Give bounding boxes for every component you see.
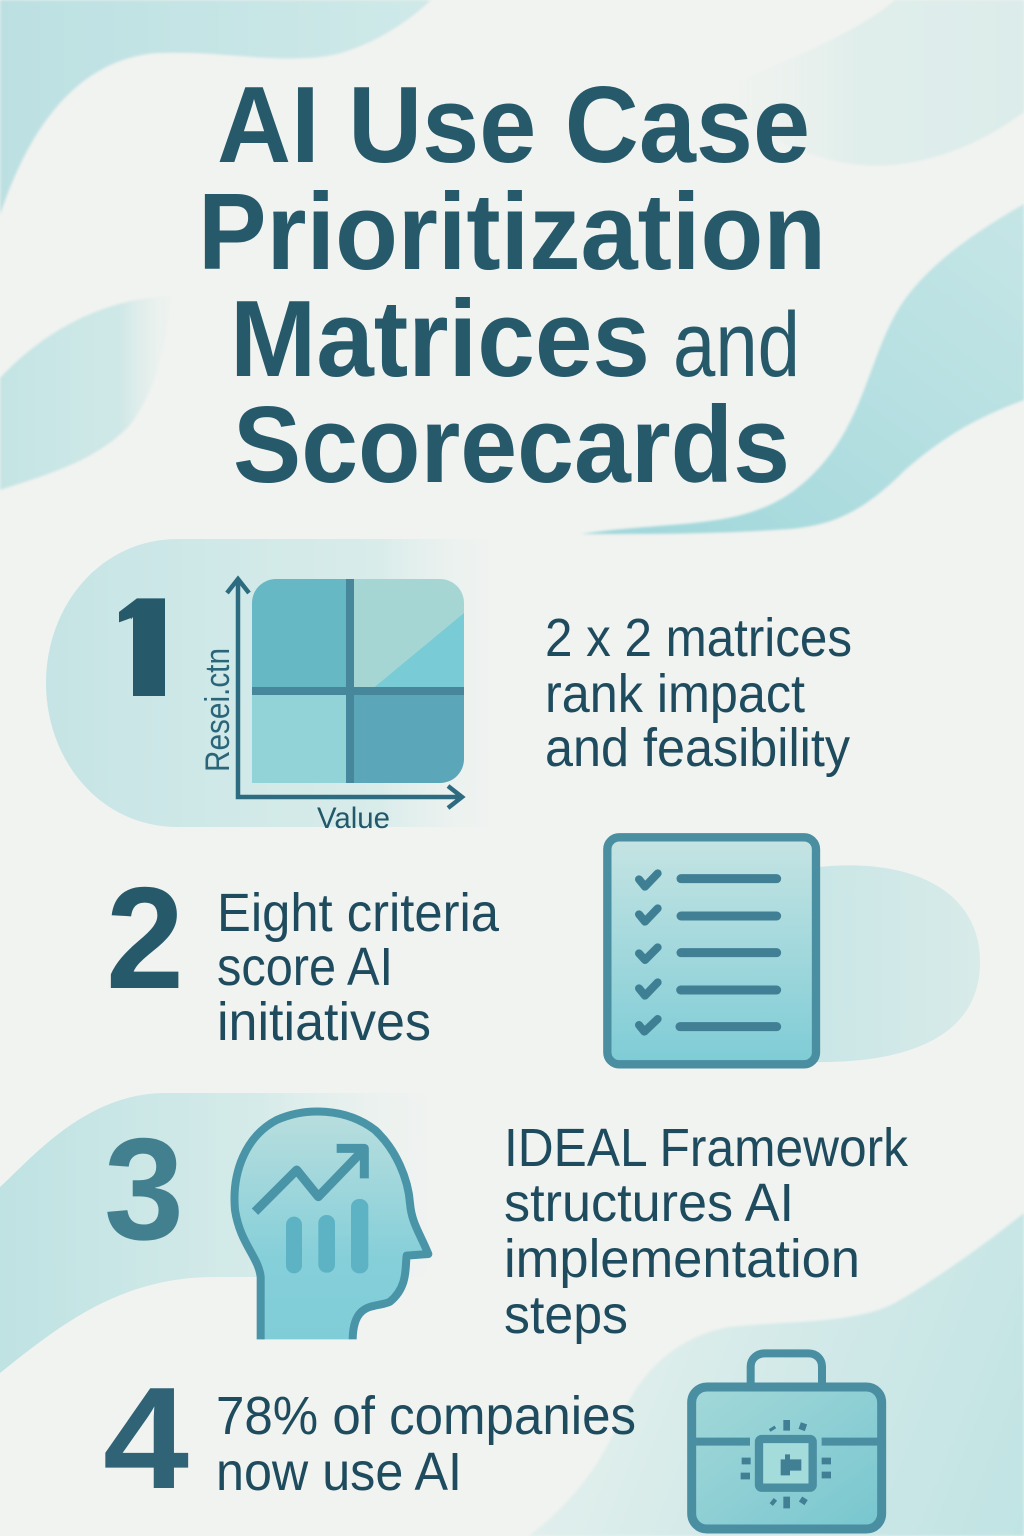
text 3: IDEAL Framework (504, 1118, 909, 1178)
y axis label: Resei.ctn (199, 648, 237, 772)
text 3: implementation (504, 1229, 860, 1289)
text 2: score AI (217, 937, 393, 997)
checkmarks (639, 873, 658, 1032)
case seam (693, 1430, 880, 1454)
title: Prioritization (198, 171, 826, 293)
text 1 (545, 608, 852, 778)
title: and (673, 294, 800, 396)
title (198, 64, 826, 506)
text 1: rank impact (545, 664, 805, 724)
icon: head with chart (235, 1112, 428, 1339)
background wave: bottom right (529, 1213, 1024, 1536)
text 3: structures AI (504, 1173, 794, 1233)
text 1: and feasibility (545, 718, 850, 778)
number 1: 1 (65, 563, 222, 750)
matrix axes (227, 579, 462, 808)
background wave: middle left (0, 296, 172, 490)
background wave: row 3 (0, 1093, 470, 1373)
chip (759, 1439, 813, 1488)
text 4 (216, 1386, 636, 1502)
x axis label: Value (317, 802, 390, 835)
list lines (680, 879, 777, 1027)
text 3 (504, 1118, 909, 1345)
background pill: row 1 (46, 539, 520, 827)
icon: briefcase with chip (692, 1353, 882, 1529)
title: Scorecards (233, 384, 790, 506)
text 1: 2 x 2 matrices (545, 608, 852, 668)
text 3: steps (504, 1285, 628, 1345)
background wave: top left (0, 0, 431, 215)
number 4: 4 (103, 1357, 189, 1519)
text 2 (217, 883, 500, 1052)
number 2: 2 (106, 857, 184, 1019)
title: Matrices (230, 278, 650, 400)
chip pins (741, 1420, 831, 1508)
number 3: 3 (104, 1108, 184, 1270)
background pill: row 2 (810, 865, 980, 1062)
text 4: now use AI (216, 1442, 462, 1502)
matrix quadrants (252, 579, 464, 784)
bars (286, 1199, 368, 1273)
trend arrow (255, 1148, 364, 1212)
icon: 2x2 matrix (199, 579, 464, 835)
title: AI Use Case (217, 64, 810, 186)
text 2: Eight criteria (217, 883, 500, 943)
background wave: top right (718, 0, 1024, 166)
icon: checklist (607, 837, 816, 1064)
text 4: 78% of companies (216, 1386, 636, 1446)
background wave: middle right (581, 204, 1024, 534)
text 2: initiatives (217, 992, 431, 1052)
